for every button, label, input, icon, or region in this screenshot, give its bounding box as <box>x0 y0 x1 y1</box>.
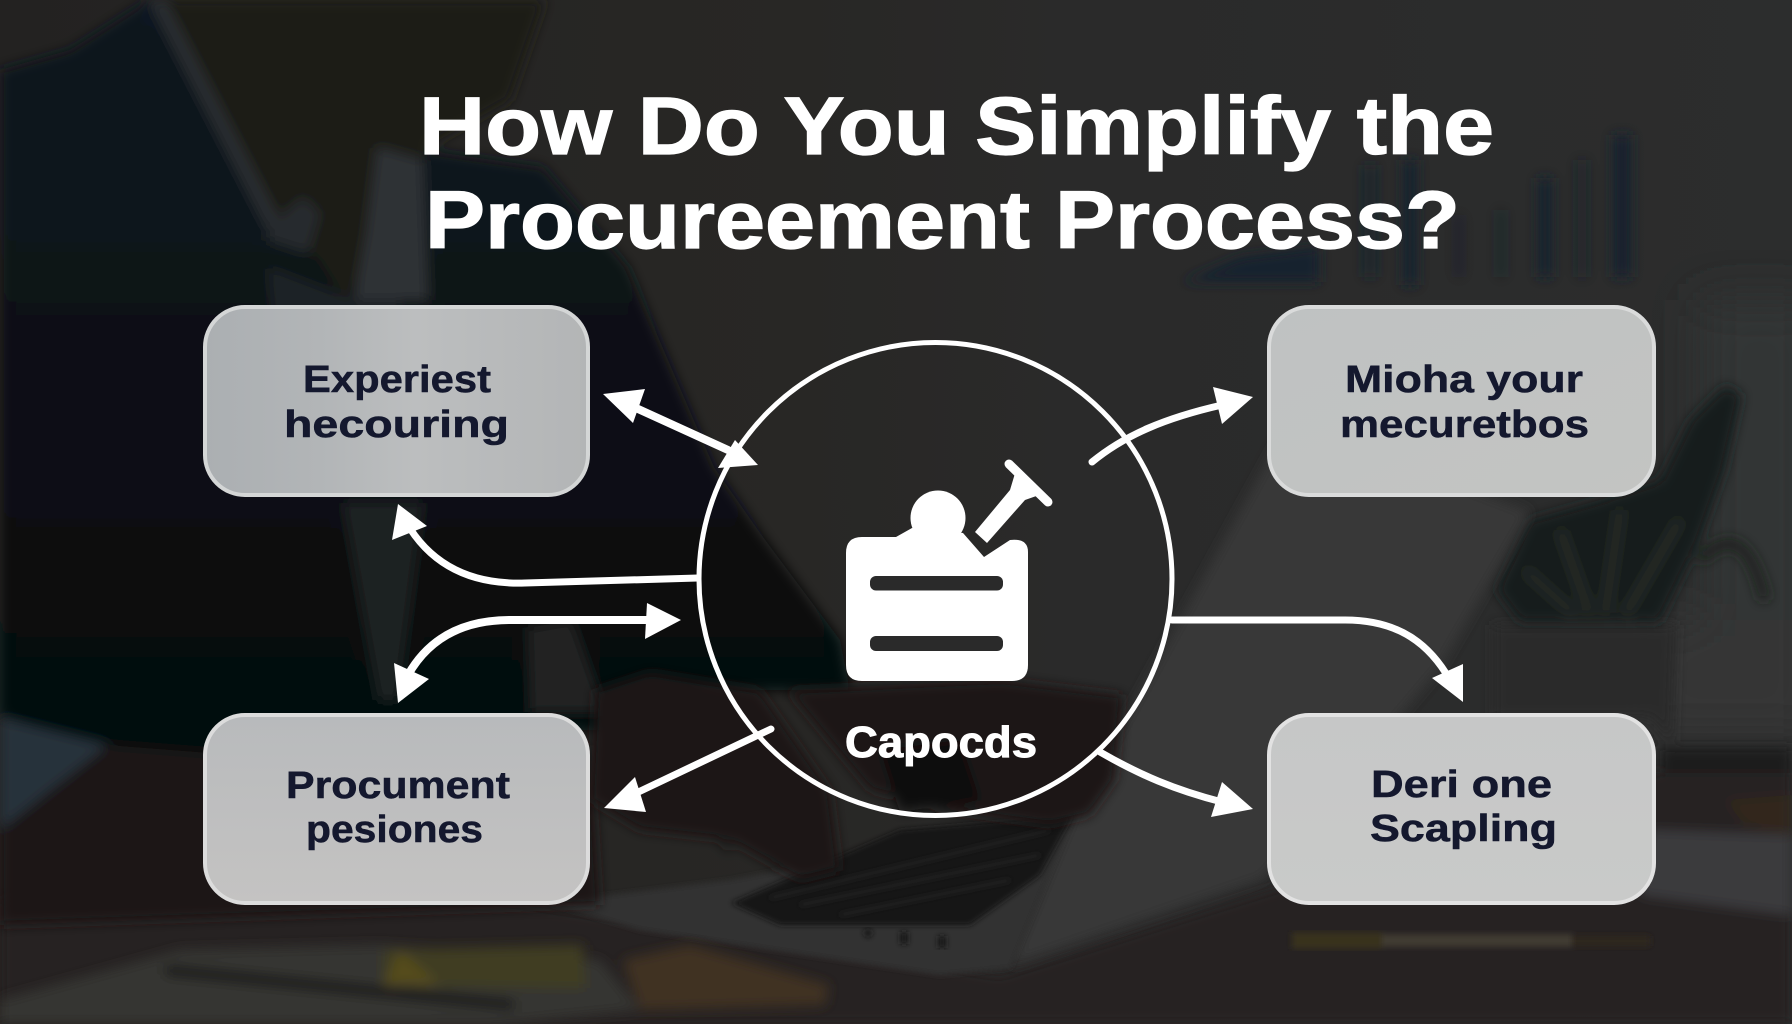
panel: bottom-left box <box>205 715 588 903</box>
panel: bottom-left box: pesiones <box>306 809 483 851</box>
icon: document box with pin <box>846 464 1048 681</box>
panel: top-right box: Mioha your <box>1345 359 1583 401</box>
title <box>419 81 1494 266</box>
arrow: top-left double-headed <box>603 389 758 468</box>
arrow: circle to top-right box <box>1092 387 1253 462</box>
title: How Do You Simplify the <box>419 81 1494 172</box>
laptop <box>548 420 1530 975</box>
panel: top-left box <box>205 307 588 495</box>
plant <box>1496 385 1765 622</box>
panel: top-right box: mecuretbos <box>1340 404 1589 446</box>
panel: bottom-right box <box>1269 715 1654 903</box>
panel: top-left box: Experiest <box>303 359 491 401</box>
arrow: curved double-headed to bottom-left box <box>394 603 681 703</box>
panel: top-left box: hecouring <box>284 404 509 446</box>
arrow: circle to top-left box <box>392 504 698 583</box>
panel: top-right box <box>1269 307 1654 495</box>
title: Procureement Process? <box>425 175 1460 266</box>
panel: bottom-right box: Scapling <box>1370 808 1557 850</box>
panel: bottom-left box: Procument <box>286 765 510 807</box>
chart on wall <box>1182 135 1631 285</box>
center label: Capocds <box>845 718 1037 767</box>
central circle <box>699 342 1172 816</box>
table <box>0 625 1792 1024</box>
arrow: circle to bottom-right box side <box>1100 752 1253 817</box>
hands <box>590 672 1123 880</box>
man: suit, shirt, face, hands <box>0 0 850 925</box>
arrow: circle to bottom-left box <box>604 729 771 812</box>
desk items <box>0 945 829 1024</box>
panel: bottom-right box: Deri one <box>1371 764 1552 806</box>
plant pot <box>1493 625 1676 745</box>
arrow: circle to bottom-right box top <box>1172 620 1463 702</box>
